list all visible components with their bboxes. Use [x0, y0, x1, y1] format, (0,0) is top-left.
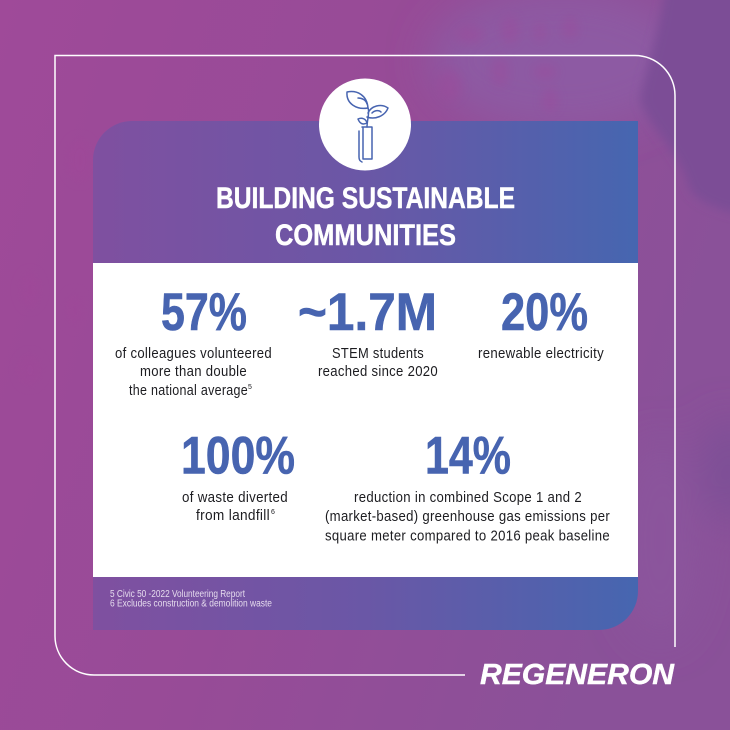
decorative frame — [55, 56, 675, 675]
panel: white content band — [93, 263, 638, 577]
stat: 14% emissions reduction: square meter compared to 2016 peak baseline — [325, 528, 610, 544]
stat: 14% emissions reduction: 14% — [425, 426, 511, 486]
stat: 57% volunteered: more than double — [140, 363, 247, 380]
stat: 14% emissions reduction: (market-based) greenhouse gas emissions per — [325, 508, 610, 525]
stat: 20% renewable electricity: renewable electricity — [478, 345, 604, 362]
footnotes: 5 Civic 50 -2022 Volunteering Report — [110, 589, 245, 600]
footnotes — [110, 589, 272, 610]
stat: 100% waste diverted: of waste diverted — [182, 489, 288, 506]
stat: 14% emissions reduction — [325, 426, 610, 544]
stat: 1.7M STEM students — [298, 283, 438, 380]
logo: Regeneron wordmark: REGENERON — [480, 659, 675, 691]
stat: 57% volunteered: the national average — [129, 382, 248, 399]
stat: 20% renewable electricity: 20% — [501, 283, 588, 342]
stat: 100% waste diverted — [181, 426, 295, 524]
stat: 1.7M STEM students: reached since 2020 — [318, 363, 438, 380]
icon: plant in test tube — [319, 78, 411, 170]
stat: 20% renewable electricity — [478, 283, 604, 362]
stat: 1.7M STEM students: ~1.7M — [298, 283, 437, 342]
stat: 1.7M STEM students: STEM students — [332, 345, 424, 362]
stat: 100% waste diverted: 100% — [181, 426, 295, 486]
stat: 100% waste diverted: 6 — [271, 509, 275, 516]
title: BUILDING SUSTAINABLE — [216, 182, 515, 215]
stat: 57% volunteered — [115, 283, 272, 399]
title: COMMUNITIES — [275, 219, 456, 252]
stat: 57% volunteered: 57% — [161, 283, 247, 342]
title — [216, 182, 515, 252]
stat: 57% volunteered: of colleagues volunteered — [115, 345, 272, 362]
footnotes: 6 Excludes construction & demolition waste — [110, 598, 272, 610]
stat: 57% volunteered: 5 — [248, 384, 252, 391]
stat: 100% waste diverted: from landfill — [196, 507, 270, 524]
stat: 14% emissions reduction: reduction in combined Scope 1 and 2 — [354, 489, 582, 506]
panel: gradient card — [93, 121, 638, 630]
